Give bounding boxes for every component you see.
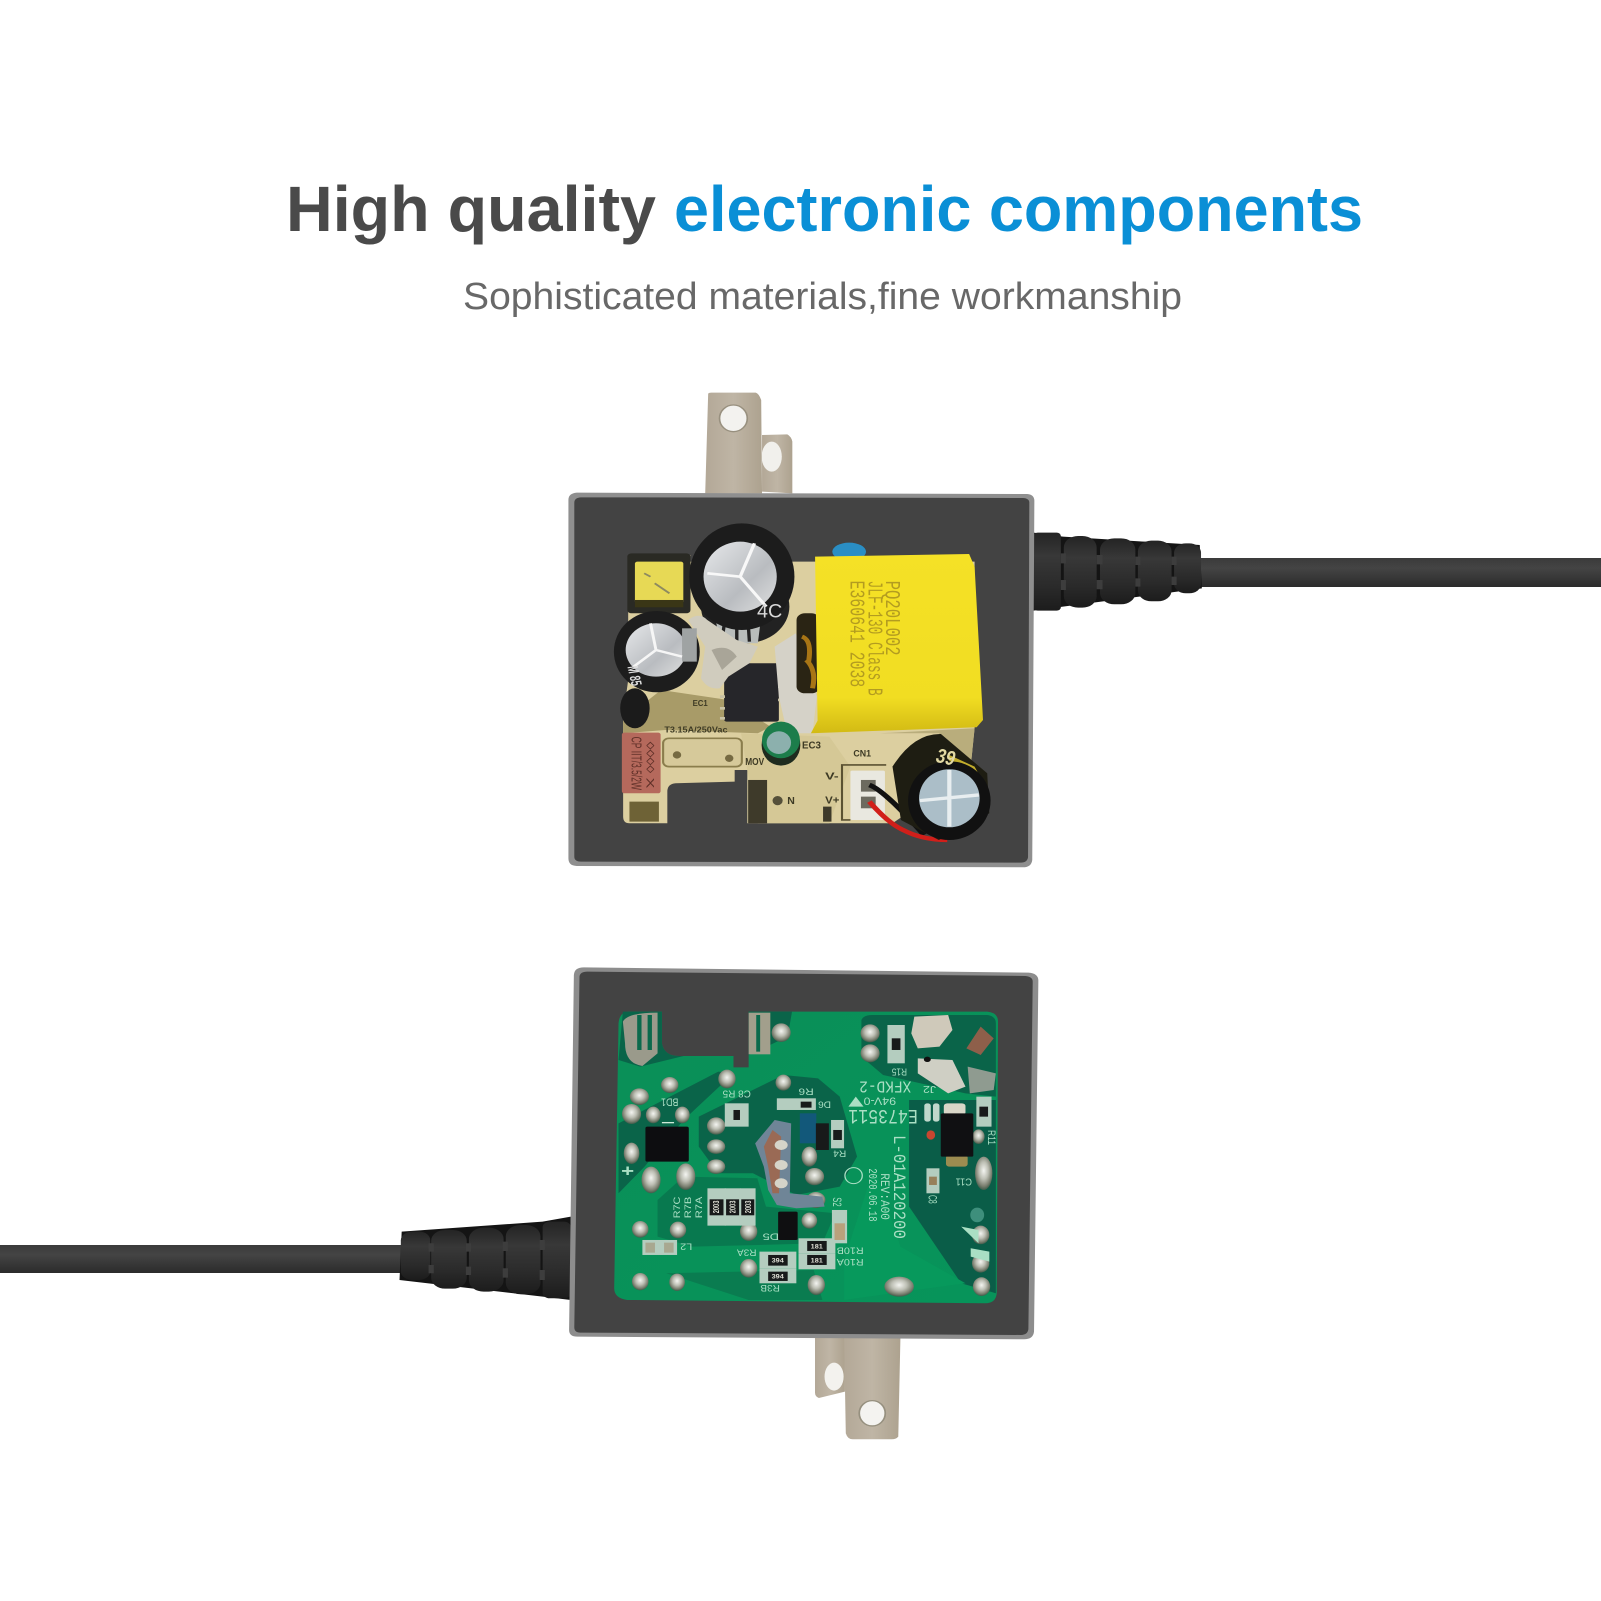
- surface mount parts: [642, 1025, 992, 1283]
- silkscreen markings: C8: [925, 1195, 939, 1204]
- pink fuse resistor: CP IIT/3.5/2W: [628, 737, 645, 791]
- pink fuse resistor: [622, 733, 661, 793]
- silkscreen markings: R7B: [682, 1196, 693, 1218]
- yellow X capacitor: [811, 554, 983, 733]
- cable: bottom adapter: [0, 1245, 402, 1273]
- solder bridge trace: [755, 1120, 825, 1208]
- board silk details: EC3: [802, 740, 821, 751]
- silkscreen markings: D6: [818, 1099, 831, 1109]
- title: [286, 173, 1363, 245]
- circuit board: [623, 555, 975, 823]
- silkscreen markings: R10A: [836, 1256, 864, 1267]
- case outline: [568, 493, 1034, 867]
- silkscreen markings: C11: [956, 1176, 972, 1187]
- surface mount parts: 181: [811, 1242, 823, 1250]
- surface mount parts: 2003: [743, 1200, 753, 1213]
- output capacitor: 39: [933, 744, 959, 770]
- surface mount parts: 2003: [728, 1200, 738, 1213]
- silkscreen markings: R10B: [837, 1245, 864, 1255]
- inductor: [627, 553, 690, 613]
- board silk details: CN1: [853, 749, 871, 759]
- silkscreen markings: 94V-0: [864, 1095, 896, 1108]
- large electrolytic capacitor: [689, 523, 794, 643]
- silkscreen markings: R11: [985, 1130, 997, 1145]
- surface mount parts: 181: [811, 1256, 823, 1264]
- strain relief: [400, 1217, 571, 1300]
- solder joints: [622, 1023, 992, 1297]
- large chip right: [924, 1103, 973, 1167]
- silkscreen markings: E473511: [848, 1103, 918, 1126]
- burnt solder area: [911, 1015, 996, 1093]
- silkscreen markings: S2: [830, 1197, 843, 1207]
- small electrolytic capacitor: M 85: [624, 665, 645, 687]
- title: electronic components: [674, 173, 1363, 245]
- yellow X capacitor: JLF-130 Class B: [862, 581, 886, 696]
- silkscreen markings: R15: [892, 1066, 907, 1077]
- subtitle: Sophisticated materials,fine workmanship: [463, 276, 1182, 318]
- green circuit board: [614, 1012, 998, 1303]
- silkscreen markings: R4: [833, 1148, 846, 1158]
- silkscreen markings: R3A: [736, 1247, 756, 1257]
- silkscreen markings: D5: [763, 1231, 779, 1241]
- prong solder slots: [623, 1013, 770, 1066]
- surface mount parts: 2003: [711, 1200, 721, 1213]
- silkscreen markings: L2: [680, 1241, 692, 1251]
- silkscreen markings: C8 R5: [723, 1088, 751, 1099]
- case outline: [569, 967, 1038, 1339]
- silkscreen markings: R7C: [671, 1197, 682, 1218]
- plug prongs: [815, 1337, 900, 1439]
- cable: top adapter: [1198, 558, 1601, 587]
- bridge rectifier chip: [645, 1122, 689, 1162]
- yellow X capacitor: PQ20L002: [880, 581, 904, 656]
- pink fuse resistor: ◊◊◊◊ X: [643, 742, 655, 789]
- transistor D5: [778, 1212, 798, 1240]
- silkscreen markings: R3B: [760, 1282, 780, 1293]
- silkscreen markings: R6: [799, 1086, 814, 1096]
- silkscreen markings: REV:A00: [876, 1173, 891, 1220]
- surface mount parts: 394: [772, 1273, 784, 1280]
- board silk details: V-: [825, 771, 839, 782]
- silkscreen markings: [621, 1066, 997, 1293]
- silkscreen markings: R7A: [693, 1196, 704, 1218]
- plug prongs: [705, 393, 792, 493]
- title: High quality: [286, 173, 656, 245]
- white output connector and wires: [850, 771, 947, 840]
- output capacitor: [893, 734, 991, 840]
- silkscreen markings: +: [621, 1163, 634, 1181]
- blue ceramic capacitor: [832, 543, 866, 561]
- IC chip: [720, 660, 783, 722]
- small electrolytic capacitor: [614, 611, 700, 692]
- large electrolytic capacitor: 4C: [757, 600, 782, 622]
- surface mount parts: 394: [772, 1257, 784, 1264]
- board silk details: T3.15A/250Vac: [664, 726, 728, 734]
- board silk details: [623, 690, 975, 823]
- adapter: bottom view with solder side: [400, 967, 1038, 1439]
- yellow X capacitor: E360641 2038: [844, 581, 868, 687]
- white glue: [688, 616, 758, 689]
- silkscreen markings: BD1: [661, 1096, 678, 1109]
- silkscreen markings: J2: [923, 1083, 936, 1095]
- black diode: [620, 688, 650, 728]
- transformer winding and glue: [775, 613, 820, 733]
- case interior: [574, 497, 1029, 863]
- case interior: [574, 972, 1033, 1335]
- silkscreen markings: 2020.06.18: [865, 1168, 878, 1222]
- silkscreen markings: L-01A120200: [888, 1135, 909, 1239]
- silkscreen markings: XFKD-2: [859, 1076, 911, 1095]
- adapter: top view with component side: [568, 393, 1202, 867]
- board silk details: EC1: [693, 699, 708, 709]
- board silk details: N: [787, 796, 795, 807]
- strain relief: [1034, 533, 1202, 611]
- board silk details: V+: [825, 795, 840, 806]
- green small capacitor: [762, 722, 800, 766]
- board silk details: MOV: [745, 757, 764, 768]
- dark copper trace areas: [619, 1012, 996, 1300]
